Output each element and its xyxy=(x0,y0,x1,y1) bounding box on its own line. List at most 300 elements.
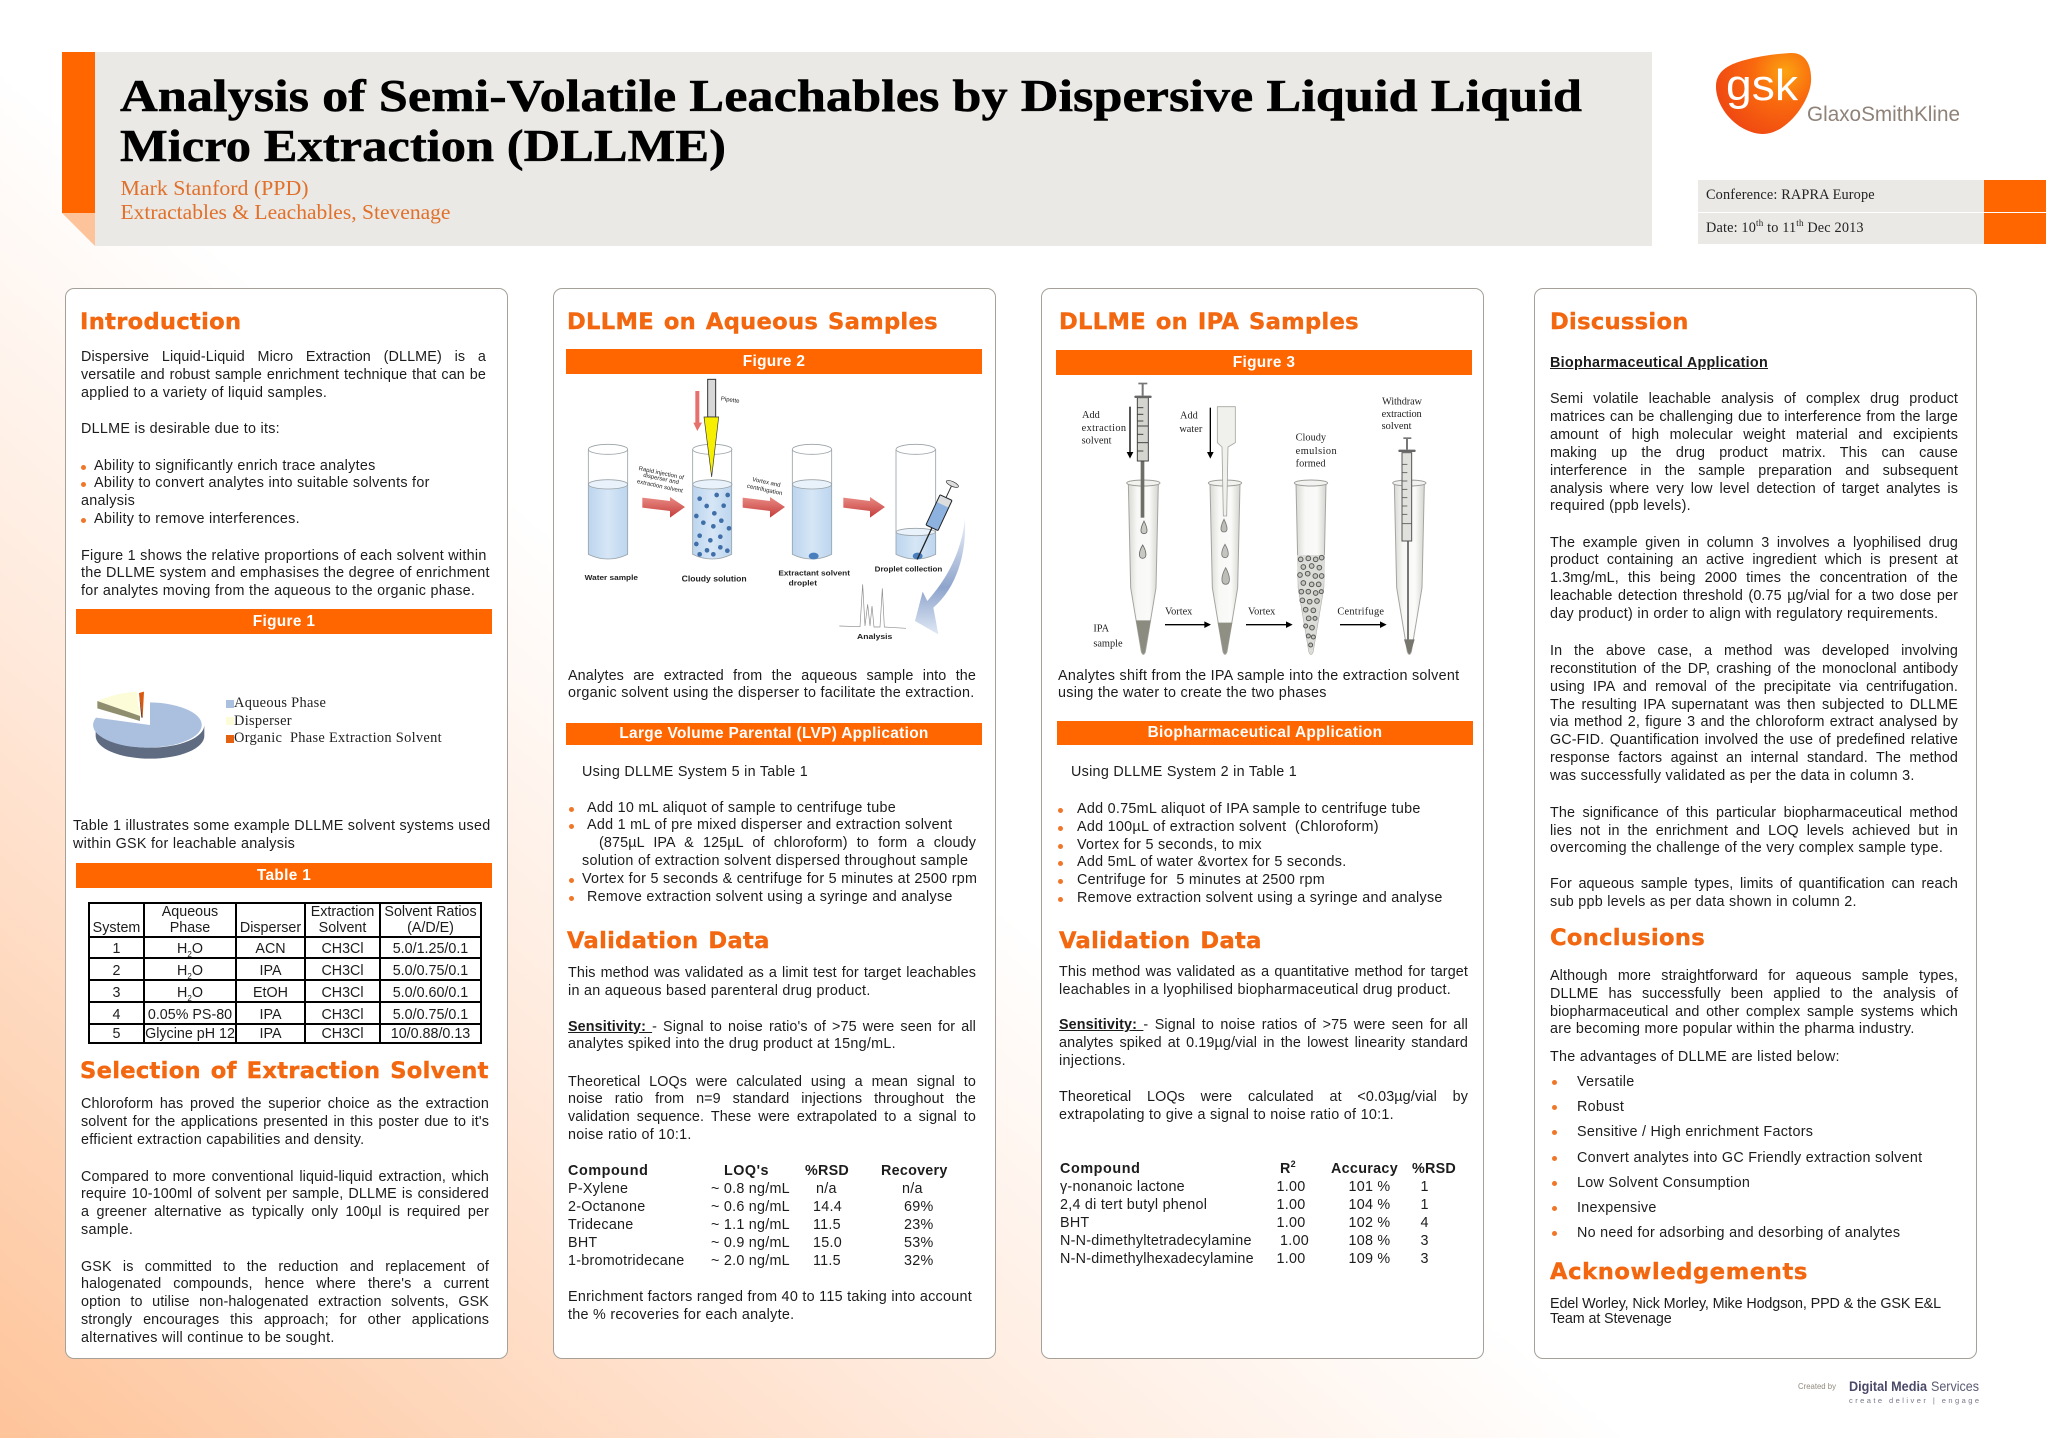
discussion paragraph 3: via method 2, figure 3 and the chloroform extract analysed by xyxy=(1550,714,1958,730)
table: LOQ results: n/a xyxy=(902,1181,923,1197)
figure 2 small labels: disperser and xyxy=(643,473,679,486)
table: accuracy results: 108 % xyxy=(1348,1233,1390,1249)
bullet list: LVP method: Remove extraction solvent using a syringe and analyse xyxy=(587,889,953,905)
table: LOQ results: ~ 0.9 ng/mL xyxy=(711,1235,790,1251)
footer credit xyxy=(1790,1375,1990,1409)
selection text 2: a greener alternative as typically only 100µl is required per xyxy=(81,1204,489,1220)
bullet list: advantages: Low Solvent Consumption xyxy=(1577,1175,1750,1191)
bullet list: biopharma method: Vortex for 5 seconds, to mix xyxy=(1077,836,1262,852)
table 1 description: within GSK for leachable analysis xyxy=(73,836,295,852)
bullet list: advantages xyxy=(1552,1074,1922,1241)
discussion paragraph 3: In the above case, a method was developed involving xyxy=(1550,643,1958,659)
table: LOQ results: 2-Octanone xyxy=(568,1199,645,1215)
table: accuracy results: 102 % xyxy=(1348,1215,1390,1231)
table: LOQ results: P-Xylene xyxy=(568,1181,628,1197)
figure 3 caption xyxy=(1058,668,1459,701)
figure 3 labels: IPA xyxy=(1093,623,1110,634)
table 1 description: Table 1 illustrates some example DLLME solvent systems used xyxy=(73,818,491,834)
sensitivity: analytes spiked at 0.19µg/vial in the lowest linearity standard xyxy=(1059,1035,1468,1051)
bar: LVP application: Large Volume Parental (LVP) Application xyxy=(619,725,929,742)
tube 3 xyxy=(1294,480,1328,654)
table: accuracy results: 1.00 xyxy=(1276,1215,1305,1231)
enrichment note: Enrichment factors ranged from 40 to 115 taking into account xyxy=(568,1289,972,1305)
table: accuracy results: 1 xyxy=(1420,1179,1429,1195)
figure 2 labels: Cloudy solution xyxy=(682,575,747,584)
table: accuracy results: Accuracy xyxy=(1331,1161,1398,1177)
discussion paragraph 3: using IPA and removal of the precipitate via centrifugation. xyxy=(1550,679,1958,695)
table 1: 5.0/1.25/0.1 xyxy=(393,941,468,957)
table: LOQ results: 15.0 xyxy=(813,1235,842,1251)
title: Mark Stanford (PPD) xyxy=(120,176,308,200)
table: accuracy results xyxy=(1060,1159,1456,1267)
theoretical LOQs: validation sequence. These were extrapolated to a signal to xyxy=(568,1109,976,1125)
table: accuracy results: 1.00 xyxy=(1276,1197,1305,1213)
discussion paragraph 4: overcoming the challenge of the very complex sample type. xyxy=(1550,840,1943,856)
discussion paragraph 3: GC-FID. Quantification involved the use of predefined relative xyxy=(1550,732,1958,748)
table: LOQ results: 11.5 xyxy=(813,1217,841,1233)
figure 3 labels: emulsion xyxy=(1296,446,1337,457)
validation intro: This method was validated as a limit test for target leachables xyxy=(568,965,976,981)
chromatogram xyxy=(839,584,906,628)
sensitivity: injections. xyxy=(1059,1053,1126,1069)
table: accuracy results: 4 xyxy=(1420,1215,1429,1231)
figure 2 caption xyxy=(568,668,976,701)
subheading: biopharmaceutical application: Biopharmaceutical Application xyxy=(1550,354,1768,370)
acknowledgements text: Team at Stevenage xyxy=(1550,1311,1672,1327)
pie legend: Aqueous Phase xyxy=(234,695,326,711)
bullet list: biopharma method: Add 100µL of extraction solvent (Chloroform) xyxy=(1077,819,1379,835)
figure 3 labels xyxy=(1082,397,1423,649)
bullet list: advantages: Robust xyxy=(1577,1099,1624,1115)
figure 1 description xyxy=(81,548,490,599)
bullet list: biopharma method: Add 5mL of water &vortex for 5 seconds. xyxy=(1077,854,1346,870)
figure 2 small labels: Vortex and xyxy=(752,477,781,489)
tube 2 xyxy=(1208,407,1242,654)
table: LOQ results: Compound xyxy=(568,1163,648,1179)
intro text: applied to a variety of liquid samples. xyxy=(81,385,327,401)
table: accuracy results: 2,4 di tert butyl phenol xyxy=(1060,1197,1207,1213)
figure 2 small labels xyxy=(636,396,783,497)
arrow: to analysis xyxy=(915,518,965,634)
table: LOQ results: ~ 1.1 ng/mL xyxy=(711,1217,790,1233)
discussion paragraph 3 xyxy=(1550,643,1958,784)
conference row: Conference: RAPRA Europe xyxy=(1706,187,1875,203)
table: accuracy results: Compound xyxy=(1060,1161,1140,1177)
figure 3 labels: Add xyxy=(1180,411,1199,422)
date row: Date: 10th to 11th Dec 2013 xyxy=(1706,218,1864,236)
footer credit: Services xyxy=(1931,1378,1979,1394)
bar: biopharmaceutical application: Biopharmaceutical Application xyxy=(1148,724,1382,741)
footer credit: create deliver | engage xyxy=(1849,1396,1979,1405)
discussion paragraph 3: response factors against an internal standard. The method xyxy=(1550,750,1958,766)
table: LOQ results: BHT xyxy=(568,1235,597,1251)
discussion paragraph 1: matrices can be challenging due to interference from the large xyxy=(1550,409,1958,425)
validation intro: This method was validated as a quantitative method for target xyxy=(1059,964,1468,980)
footer credit: Created by xyxy=(1798,1381,1837,1391)
beaker: droplet collection xyxy=(896,444,936,559)
figure 1 description: Figure 1 shows the relative proportions of each solvent within xyxy=(81,548,487,564)
pie legend xyxy=(226,695,442,746)
table 1: Extraction xyxy=(311,904,374,920)
table 1: System xyxy=(93,920,140,936)
table: accuracy results: 1 xyxy=(1420,1197,1429,1213)
heading: Conclusions: Conclusions xyxy=(1550,925,1705,951)
figure 2 labels xyxy=(585,564,943,641)
selection text 3 xyxy=(81,1258,489,1346)
table 1: Glycine pH 12 xyxy=(145,1026,235,1042)
selection text 1: efficient extraction capabilities and density. xyxy=(81,1132,364,1148)
bullet list: biopharma method: Add 0.75mL aliquot of IPA sample to centrifuge tube xyxy=(1077,801,1421,817)
acknowledgements text: Edel Worley, Nick Morley, Mike Hodgson, PPD & the GSK E&L xyxy=(1550,1296,1941,1312)
selection text 3: strongly encourages this approach; for other applications xyxy=(81,1312,489,1328)
bar: Table 1 xyxy=(76,863,492,888)
bullet list: benefits: Ability to remove interferences. xyxy=(94,511,300,527)
figure 3 labels: Withdraw xyxy=(1382,397,1423,408)
beaker: cloudy solution xyxy=(693,444,732,559)
table: LOQ results: Tridecane xyxy=(568,1217,634,1233)
selection text 2: sample. xyxy=(81,1222,133,1238)
theoretical LOQs: extrapolating to give a signal to noise ratio of 10:1. xyxy=(1059,1107,1394,1123)
panel: DLLME on IPA Samples xyxy=(1041,288,1484,1359)
discussion paragraph 5 xyxy=(1550,876,1958,910)
figure 2 labels: Water sample xyxy=(585,573,638,582)
table 1: 5 xyxy=(113,1026,120,1042)
table 1: 0.05% PS-80 xyxy=(148,1007,232,1023)
discussion paragraph 2: product containing an active ingredient which is present at xyxy=(1550,552,1958,568)
bullet list: LVP method: Add 1 mL of pre mixed disperser and extraction solvent xyxy=(587,817,952,833)
GSK logo: gsk xyxy=(1726,61,1799,110)
table 1: CH3Cl xyxy=(321,985,364,1001)
bullet list: biopharma method: Remove extraction solvent using a syringe and analyse xyxy=(1077,890,1443,906)
intro text xyxy=(81,349,486,401)
conclusions paragraph xyxy=(1550,968,1958,1037)
discussion paragraph 3: reconstitution of the DP, crashing of the monoclonal antibody xyxy=(1550,661,1958,677)
figure 3 labels: solvent xyxy=(1382,421,1412,432)
discussion paragraph 3: The resulting IPA supernatant was then subjected to DLLME xyxy=(1550,697,1958,713)
table 1: CH3Cl xyxy=(321,941,364,957)
figure 3 labels: extraction xyxy=(1382,409,1422,420)
figure 2 small labels: Rapid injection of xyxy=(638,466,685,482)
intro text: Dispersive Liquid-Liquid Micro Extraction (DLLME) is a xyxy=(81,349,486,365)
table: accuracy results: 3 xyxy=(1420,1233,1429,1249)
discussion paragraph 1: making up the drug product matrix. This can cause xyxy=(1550,445,1958,461)
title: Micro Extraction (DLLME) xyxy=(120,120,726,171)
table 1 xyxy=(88,902,482,1044)
bar: Figure 2 xyxy=(566,349,982,374)
icon: syringe xyxy=(911,479,959,562)
panel: Discussion xyxy=(1534,288,1977,1359)
figure 1 description: for analytes moving from the aqueous to the organic phase. xyxy=(81,583,475,599)
validation intro: leachables in a lyophilised biopharmaceutical drug product. xyxy=(1059,982,1451,998)
icon: pipette xyxy=(693,379,719,477)
selection text 3: option to utilise non-halogenated extraction solvents, GSK xyxy=(81,1294,489,1310)
table: LOQ results: 14.4 xyxy=(813,1199,842,1215)
bullet list: advantages: Versatile xyxy=(1577,1074,1635,1090)
table: LOQ results: 11.5 xyxy=(813,1253,841,1269)
enrichment note xyxy=(568,1289,972,1323)
bar: Figure 1 xyxy=(76,609,492,634)
table: accuracy results: 109 % xyxy=(1348,1251,1390,1267)
bar: Figure 3 xyxy=(1056,350,1472,375)
table: LOQ results: 69% xyxy=(904,1199,933,1215)
figure 2: DLLME process diagram xyxy=(584,378,966,641)
discussion paragraph 4 xyxy=(1550,805,1958,856)
bar: LVP application xyxy=(566,723,982,745)
figure 3 labels: water xyxy=(1179,424,1203,435)
date row xyxy=(1698,213,2046,244)
table: accuracy results: R2 xyxy=(1280,1159,1296,1177)
GSK logo: GlaxoSmithKline xyxy=(1807,103,1960,126)
table: accuracy results: N-N-dimethylhexadecylamine xyxy=(1060,1251,1254,1267)
table 1 description xyxy=(73,818,491,852)
table: LOQ results xyxy=(568,1163,948,1269)
table 1: Solvent Ratios xyxy=(384,904,477,920)
table: accuracy results: %RSD xyxy=(1412,1161,1456,1177)
figure 3 labels: extraction xyxy=(1082,423,1126,434)
sensitivity: analytes spiked into the drug product at 15ng/mL. xyxy=(568,1036,896,1052)
folded corner xyxy=(62,213,95,246)
heading: Acknowledgements: Acknowledgements xyxy=(1550,1259,1808,1285)
theoretical LOQs: Theoretical LOQs were calculated at <0.03µg/vial by xyxy=(1059,1089,1468,1105)
figure 2 small labels: extraction solvent xyxy=(636,479,683,495)
figure 2 small labels: Pipette xyxy=(720,396,740,405)
panel: DLLME on Aqueous Samples xyxy=(553,288,996,1359)
theoretical LOQs: Theoretical LOQs were calculated using a mean signal to xyxy=(568,1074,976,1090)
theoretical LOQs: noise ratio from n=9 standard injections throughout the xyxy=(568,1091,976,1107)
table 1: IPA xyxy=(260,1026,281,1042)
figure 2 caption: organic solvent using the disperser to facilitate the extraction. xyxy=(568,685,974,701)
sensitivity xyxy=(568,1018,976,1052)
heading: DLLME on Aqueous Samples: DLLME on Aqueous Samples xyxy=(567,309,938,335)
table: accuracy results: BHT xyxy=(1060,1215,1089,1231)
table: accuracy results: 1.00 xyxy=(1280,1233,1309,1249)
selection text 3: halogenated compounds, hence where there's a current xyxy=(81,1276,489,1292)
conference info xyxy=(1698,180,2046,244)
selection text 3: GSK is committed to the reduction and replacement of xyxy=(81,1258,489,1274)
sensitivity xyxy=(1059,1017,1468,1069)
bar: Table 1: Table 1 xyxy=(257,867,311,884)
table 1: (A/D/E) xyxy=(407,920,454,936)
bullet list: advantages: No need for adsorbing and desorbing of analytes xyxy=(1577,1225,1900,1241)
figure 3 caption: Analytes shift from the IPA sample into the extraction solvent xyxy=(1058,668,1459,684)
figure 2 labels: Analysis xyxy=(857,632,892,641)
table 1: 5.0/0.75/0.1 xyxy=(393,963,468,979)
bullet list: benefits: Ability to convert analytes into suitable solvents for xyxy=(94,475,430,491)
table 1: 3 xyxy=(113,985,120,1001)
table 1: CH3Cl xyxy=(321,1007,364,1023)
orange accent strip xyxy=(62,52,95,213)
selection text 2 xyxy=(81,1168,489,1238)
theoretical LOQs xyxy=(1059,1089,1468,1123)
header band xyxy=(62,52,1652,246)
theoretical LOQs xyxy=(568,1074,976,1143)
table: accuracy results: 104 % xyxy=(1348,1197,1390,1213)
table: accuracy results: 101 % xyxy=(1348,1179,1390,1195)
figure 3 labels: Vortex xyxy=(1248,607,1276,618)
bar: Figure 2: Figure 2 xyxy=(743,353,805,370)
table 1: CH3Cl xyxy=(321,963,364,979)
figure 3 labels: Centrifuge xyxy=(1337,607,1384,618)
desirable intro: DLLME is desirable due to its: xyxy=(81,421,280,437)
discussion paragraph 1: amount of high molecular weight material and excipients xyxy=(1550,427,1958,443)
beaker: extractant droplet xyxy=(792,444,832,559)
conclusions paragraph: are becoming more popular within the pharma industry. xyxy=(1550,1021,1915,1037)
figure 1 description: the DLLME system and emphasises the degree of enrichment xyxy=(81,565,490,581)
bullet list: LVP method: (875µL IPA & 125µL of chloroform) to form a cloudy xyxy=(599,835,976,851)
table 1: CH3Cl xyxy=(321,1026,364,1042)
bullet list: advantages: Convert analytes into GC Friendly extraction solvent xyxy=(1577,1150,1922,1166)
arrow: step 2 xyxy=(743,497,785,518)
figure 2 caption: Analytes are extracted from the aqueous sample into the xyxy=(568,668,976,684)
validation intro xyxy=(568,965,976,999)
discussion paragraph 1: Semi volatile leachable analysis of complex drug product xyxy=(1550,391,1958,407)
table 1: IPA xyxy=(260,1007,281,1023)
table: LOQ results: ~ 2.0 ng/mL xyxy=(711,1253,790,1269)
header background xyxy=(95,52,1652,246)
acknowledgements text xyxy=(1550,1296,1958,1328)
table 1: Disperser xyxy=(240,920,301,936)
table: LOQ results: 53% xyxy=(904,1235,933,1251)
table: LOQ results: ~ 0.6 ng/mL xyxy=(711,1199,790,1215)
figure 3 labels: Add xyxy=(1082,410,1101,421)
bullet list: benefits xyxy=(81,458,430,527)
table: LOQ results: 32% xyxy=(904,1253,933,1269)
selection text 1: Chloroform has proved the superior choice as the extraction xyxy=(81,1096,489,1112)
table: accuracy results: N-N-dimethyltetradecylamine xyxy=(1060,1233,1252,1249)
table 1: IPA xyxy=(260,963,281,979)
arrows xyxy=(1127,407,1387,628)
figure 2 labels: Extractant solvent xyxy=(778,569,850,578)
bullet list: benefits: analysis xyxy=(81,493,135,509)
bar: biopharmaceutical application xyxy=(1057,721,1473,745)
advantages intro: The advantages of DLLME are listed below: xyxy=(1550,1049,1840,1065)
conclusions paragraph: Although more straightforward for aqueous sample types, xyxy=(1550,968,1958,984)
figure 2 labels: Droplet collection xyxy=(875,564,943,573)
GSK logo xyxy=(1716,53,1960,134)
table: LOQ results: n/a xyxy=(816,1181,837,1197)
figure 3 caption: using the water to create the two phases xyxy=(1058,685,1327,701)
table 1: 5.0/0.60/0.1 xyxy=(393,985,468,1001)
heading: Selection of Extraction Solvent: Selection of Extraction Solvent xyxy=(80,1058,489,1084)
conclusions paragraph: biopharmaceutical and other complex sample systems which xyxy=(1550,1004,1958,1020)
discussion paragraph 2: The example given in column 3 involves a lyophilised drug xyxy=(1550,534,1958,550)
figure 3: IPA sample process xyxy=(1082,382,1426,655)
table 1: ACN xyxy=(255,941,286,957)
figure 3 labels: solvent xyxy=(1082,436,1112,447)
table: LOQ results: 23% xyxy=(904,1217,933,1233)
table 1: 2 xyxy=(113,963,120,979)
bullet list: LVP method: Add 10 mL aliquot of sample to centrifuge tube xyxy=(587,800,896,816)
discussion paragraph 1: required (ppb levels). xyxy=(1550,498,1691,514)
title: Extractables & Leachables, Stevenage xyxy=(120,200,450,224)
conference row xyxy=(1698,180,2046,212)
heading: Introduction: Introduction xyxy=(80,309,241,335)
figure 3 labels: Vortex xyxy=(1165,607,1193,618)
heading: Validation Data: Validation Data xyxy=(1059,928,1262,954)
beaker: water sample xyxy=(588,444,628,559)
bullet list: LVP method: Vortex for 5 seconds & centrifuge for 5 minutes at 2500 rpm xyxy=(582,871,977,887)
selection text 2: require 10-100ml of solvent per sample, DLLME is considered xyxy=(81,1186,489,1202)
table 1: EtOH xyxy=(253,985,288,1001)
theoretical LOQs: noise ratio of 10:1. xyxy=(568,1127,692,1143)
bar: Figure 1: Figure 1 xyxy=(253,613,315,630)
sensitivity: Sensitivity: - Signal to noise ratio's of >75 were seen for all xyxy=(568,1018,976,1034)
bullet list: advantages: Sensitive / High enrichment Factors xyxy=(1577,1124,1813,1140)
title xyxy=(120,70,1582,224)
table: LOQ results: Recovery xyxy=(881,1163,948,1179)
figure 3 labels: Cloudy xyxy=(1296,433,1327,444)
table: LOQ results: LOQ's xyxy=(724,1163,769,1179)
footer credit: Digital Media xyxy=(1849,1378,1927,1394)
pie legend: Disperser xyxy=(234,712,292,728)
discussion paragraph 5: sub ppb levels as per data shown in column 2. xyxy=(1550,894,1857,910)
tube 4 xyxy=(1393,437,1426,654)
table: LOQ results: ~ 0.8 ng/mL xyxy=(711,1181,790,1197)
bar: Figure 3: Figure 3 xyxy=(1233,354,1295,371)
table 1: Aqueous xyxy=(162,904,218,920)
enrichment note: the % recoveries for each analyte. xyxy=(568,1307,794,1323)
heading: Discussion: Discussion xyxy=(1550,309,1689,335)
figure 2 labels: droplet xyxy=(789,578,817,587)
table: LOQ results: %RSD xyxy=(805,1163,849,1179)
table: LOQ results: 1-bromotridecane xyxy=(568,1253,684,1269)
heading: DLLME on IPA Samples: DLLME on IPA Samples xyxy=(1059,309,1359,335)
panel: left column xyxy=(65,288,508,1359)
selection text 1 xyxy=(81,1096,489,1148)
discussion paragraph 2: leachable detection threshold (0.75 µg/vial for a two dose per xyxy=(1550,588,1958,604)
using system 5: Using DLLME System 5 in Table 1 xyxy=(582,764,808,780)
discussion paragraph 2 xyxy=(1550,534,1958,622)
validation intro xyxy=(1059,964,1468,998)
discussion paragraph 4: The significance of this particular biopharmaceutical method xyxy=(1550,805,1958,821)
sensitivity: Sensitivity: - Signal to noise ratios of >75 were seen for all xyxy=(1059,1017,1468,1033)
tube 1 xyxy=(1127,383,1160,654)
table 1: 10/0.88/0.13 xyxy=(391,1026,470,1042)
title: Analysis of Semi-Volatile Leachables by Dispersive Liquid Liquid xyxy=(120,70,1582,121)
intro text: versatile and robust sample enrichment technique that can be xyxy=(81,367,486,383)
validation intro: in an aqueous based parenteral drug product. xyxy=(568,983,871,999)
table 1: 4 xyxy=(113,1007,120,1023)
discussion paragraph 5: For aqueous sample types, limits of quantification can reach xyxy=(1550,876,1958,892)
discussion paragraph 3: was successfully validated as per the data in column 3. xyxy=(1550,768,1915,784)
table: accuracy results: 1.00 xyxy=(1276,1179,1305,1195)
pie chart xyxy=(93,692,204,759)
discussion paragraph 2: 1.3mg/mL, this being 2000 times the concentration of the xyxy=(1550,570,1958,586)
table: accuracy results: 1.00 xyxy=(1276,1251,1305,1267)
discussion paragraph 1: analysis where very low level detection of target analytes is xyxy=(1550,481,1958,497)
figure 3 labels: sample xyxy=(1093,638,1123,649)
bullet list: LVP method xyxy=(569,800,977,905)
discussion paragraph 2: day product) in order to align with regulatory requirements. xyxy=(1550,606,1938,622)
figure 2 small labels: centrifugation xyxy=(746,484,783,497)
table 1: 1 xyxy=(113,941,120,957)
arrow: step 3 xyxy=(843,497,885,518)
table: accuracy results: 3 xyxy=(1420,1251,1429,1267)
discussion paragraph 1: interference in the sample preparation and subsequent xyxy=(1550,463,1958,479)
figure 3 labels: formed xyxy=(1296,459,1326,470)
bullet list: LVP method: solution of extraction solvent dispersed throughout sample xyxy=(582,853,968,869)
selection text 3: alternatives will continue to be sought. xyxy=(81,1330,335,1346)
table 1: Solvent xyxy=(319,920,366,936)
selection text 1: solvent for the applications presented in this poster due to it's xyxy=(81,1114,489,1130)
selection text 2: Compared to more conventional liquid-liquid extraction, which xyxy=(81,1168,489,1184)
table 1: Phase xyxy=(170,920,210,936)
using system 2: Using DLLME System 2 in Table 1 xyxy=(1071,764,1297,780)
discussion paragraph 1 xyxy=(1550,391,1958,514)
discussion paragraph 4: lies not in the enrichment and LOQ levels achieved but in xyxy=(1550,822,1958,838)
arrow: step 1 xyxy=(642,497,685,518)
table: accuracy results: γ-nonanoic lactone xyxy=(1060,1179,1185,1195)
